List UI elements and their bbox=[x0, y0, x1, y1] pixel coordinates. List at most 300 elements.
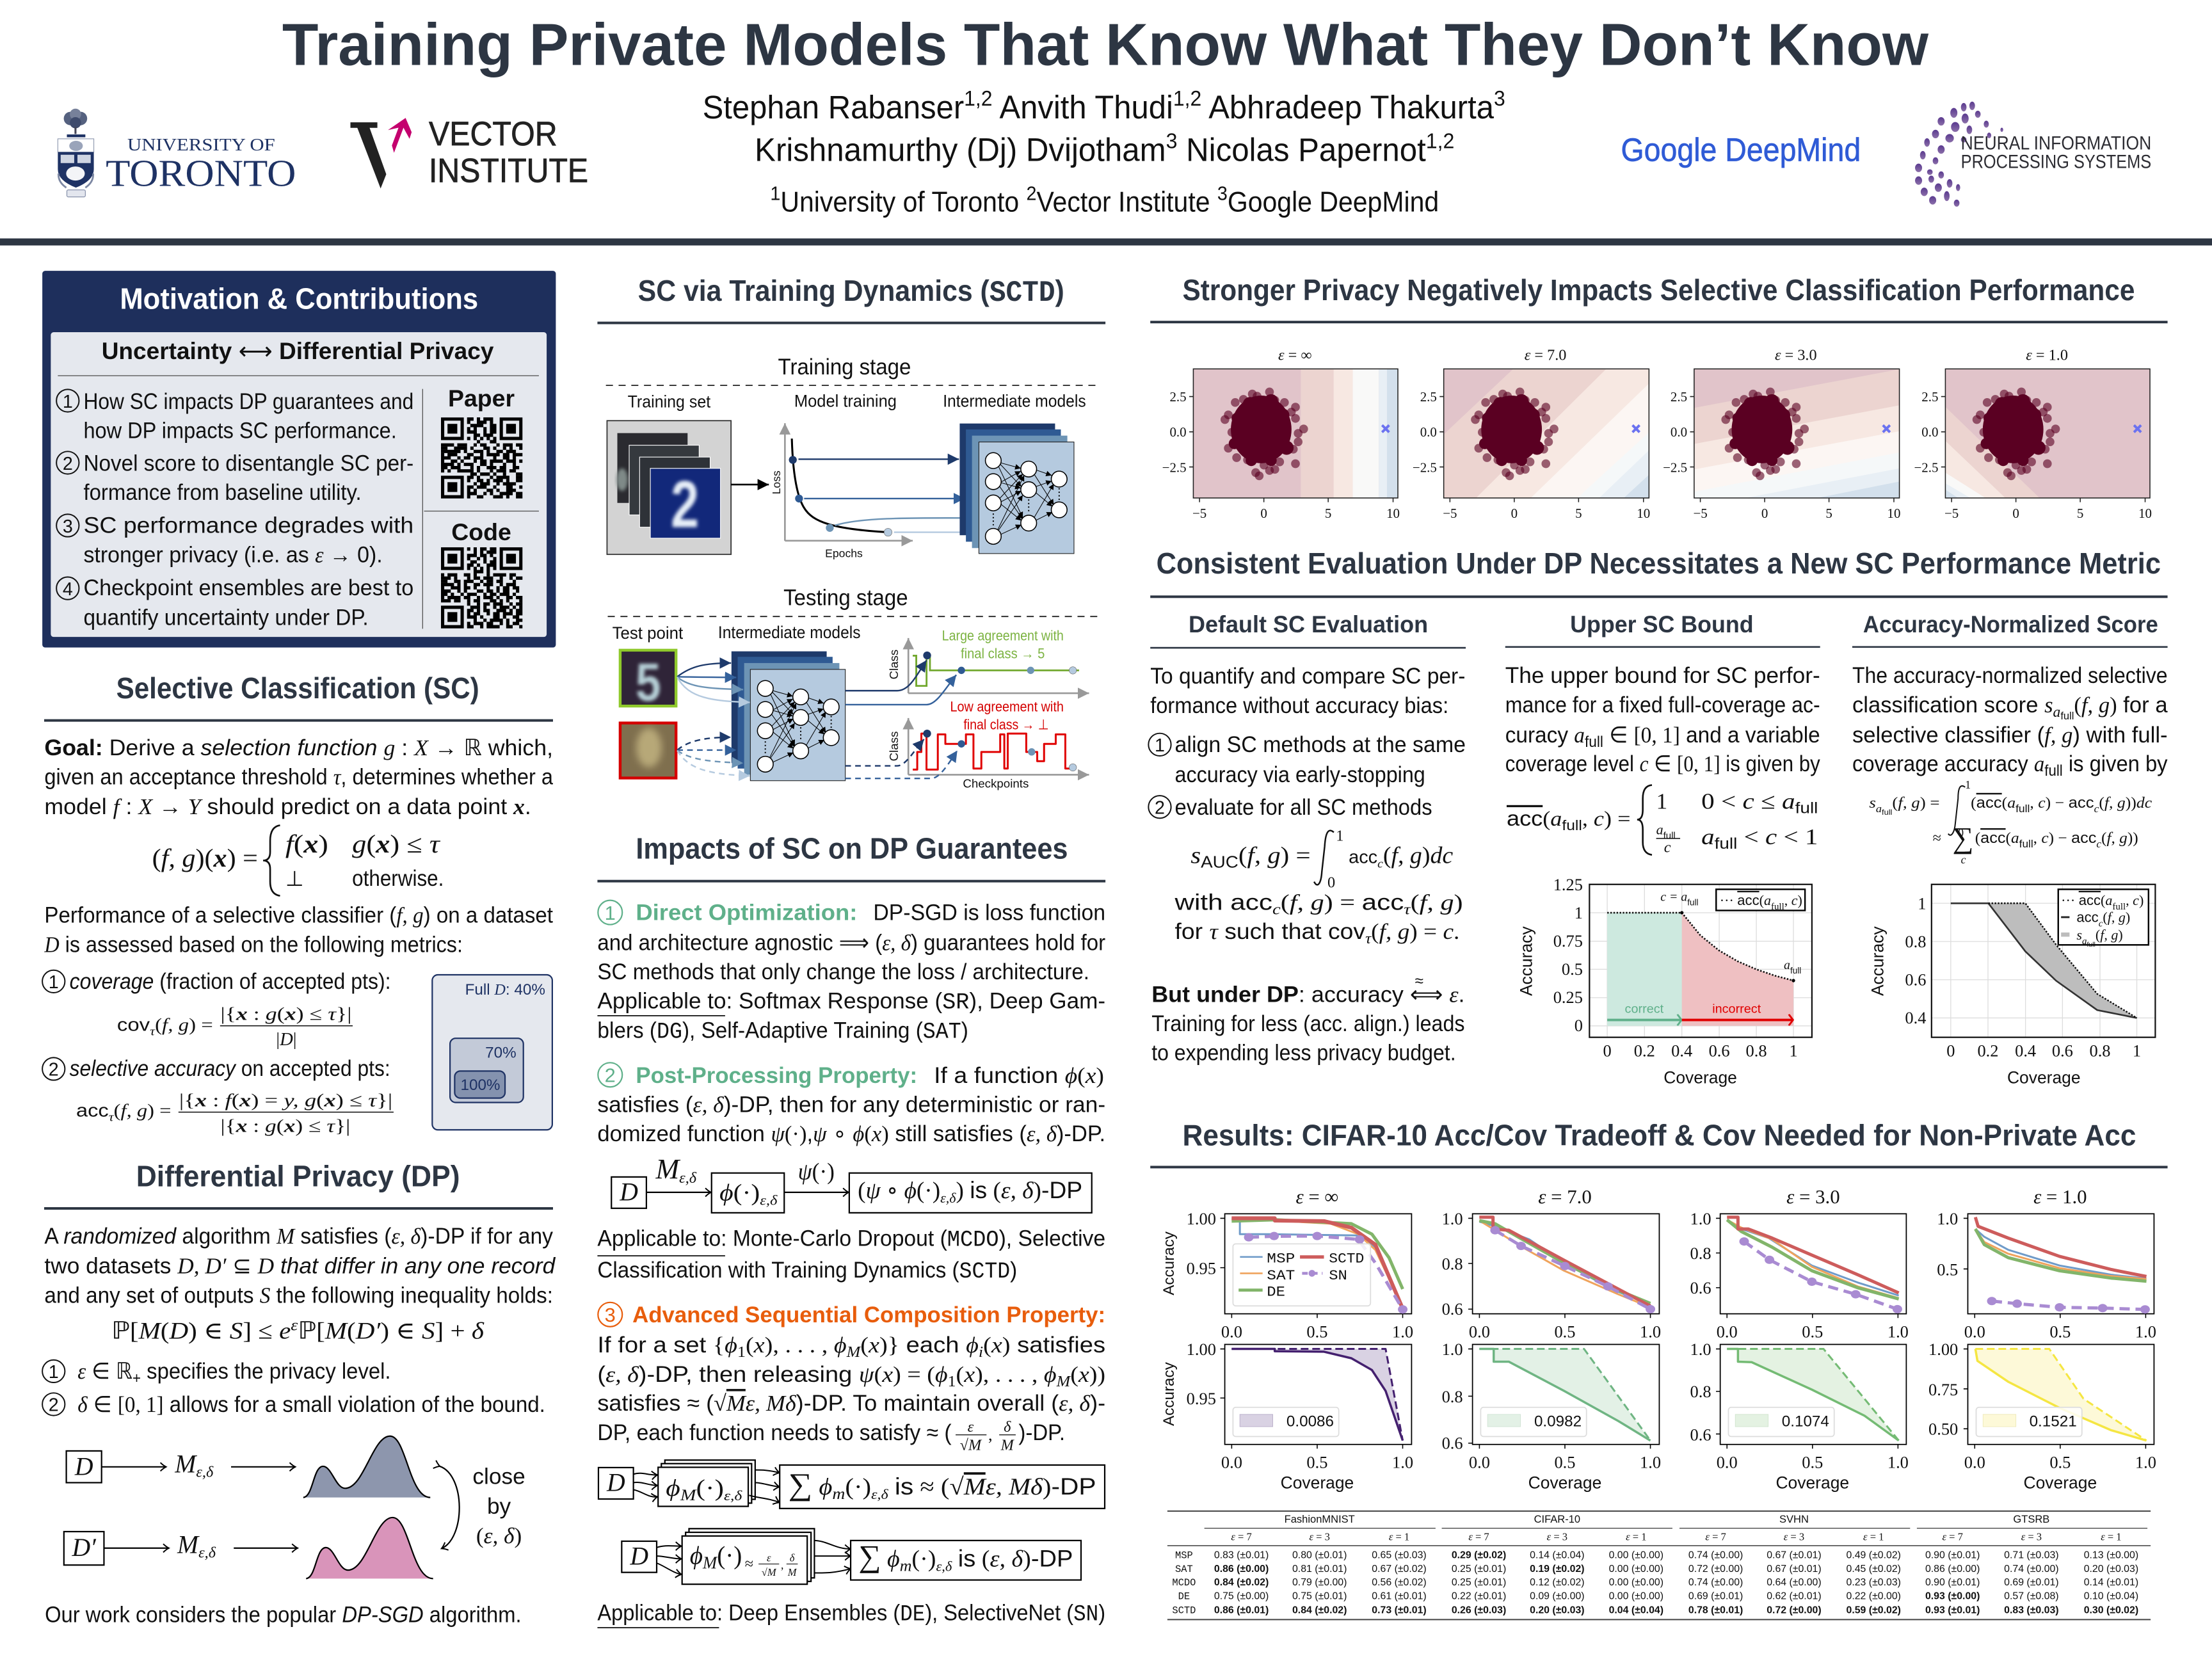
chart: accuracy-coverage epsilon 7: 0.8 bbox=[1442, 1254, 1463, 1274]
panel heading: Motivation & Contributions bbox=[120, 282, 478, 316]
row: SAT: 0.86 (±0.00) bbox=[1925, 1564, 1980, 1575]
chart: accuracy-coverage epsilon 3: 0.0 bbox=[1717, 1322, 1738, 1341]
formula: DP inequality: ℙ[M(D) ∈ S] ≤ eεℙ[M(D′) ∈ S] + δ bbox=[111, 1315, 485, 1345]
row: MCDO: 0.90 (±0.01) bbox=[1925, 1577, 1980, 1588]
legend: 0.1521 bbox=[2030, 1413, 2077, 1430]
formula: selective classifier: f(x) bbox=[285, 830, 328, 858]
chart: decision boundary epsilon 3: −2.5 bbox=[1663, 460, 1687, 475]
chart: upper bound accuracy vs coverage bbox=[1517, 875, 1812, 1087]
diagram: testing stage bbox=[608, 585, 1099, 790]
formula: selective classifier: g(x) ≤ τ bbox=[352, 830, 441, 858]
legend: SN bbox=[1329, 1268, 1347, 1284]
chart: decision boundary epsilon 1: 0.0 bbox=[1921, 424, 1938, 440]
chart: decision boundary epsilon 7: 2.5 bbox=[1420, 389, 1437, 405]
diagram: DP mechanism on neighbouring datasets: Mε,δ bbox=[174, 1450, 214, 1480]
contribution 4: Checkpoint ensembles are best to bbox=[83, 575, 413, 600]
chart: loss curve: Epochs bbox=[825, 547, 863, 560]
panel: motivation and contributions bbox=[42, 271, 556, 648]
text: goal definition: model f : X → Y should predict on a data point x. bbox=[44, 794, 531, 819]
formula: per-function budget: ε bbox=[968, 1418, 974, 1436]
chart: accuracy-coverage epsilon 1: 1.0 bbox=[2135, 1322, 2156, 1341]
contribution 2: Novel score to disentangle SC per- bbox=[83, 451, 413, 476]
chart: decision boundary epsilon infinity: ε = ∞ bbox=[1278, 346, 1312, 364]
column: default SC evaluation: Training for less (acc. align.) leads bbox=[1151, 1011, 1464, 1036]
contribution 3: SC performance degrades with bbox=[83, 513, 413, 538]
section: direct optimization bbox=[597, 901, 1105, 1045]
column: default SC evaluation: ≈ bbox=[1415, 973, 1423, 990]
row: SCTD: 0.78 (±0.01) bbox=[1688, 1605, 1743, 1616]
text: applicable to MCDO and SCTD: Classification with Training Dynamics (SCTD) bbox=[597, 1258, 1017, 1285]
column: accuracy-normalized score bbox=[1852, 611, 2168, 1087]
chart: coverage gap epsilon 7: Coverage bbox=[1528, 1473, 1601, 1492]
chart: coverage gap epsilon 3 bbox=[1690, 1340, 1909, 1492]
chart: decision boundary epsilon 3: 10 bbox=[1887, 506, 1900, 521]
formula: upper bound: a full < c < 1 bbox=[1701, 824, 1818, 853]
section: advanced composition bbox=[597, 1302, 1105, 1454]
row: MCDO: 0.12 (±0.02) bbox=[1530, 1577, 1585, 1588]
chart: upper bound accuracy vs coverage: 0.75 bbox=[1553, 931, 1583, 950]
chart: score area: 0.4 bbox=[1905, 1008, 1926, 1027]
subheading: Uncertainty ⟷ Differential Privacy bbox=[102, 337, 494, 365]
row: DE: 0.22 (±0.00) bbox=[1847, 1591, 1901, 1602]
chart: coverage gap epsilon infinity bbox=[1187, 1340, 1413, 1492]
column: default SC evaluation: for τ such that cov τ(f, g) = c. bbox=[1175, 919, 1459, 947]
chart: upper bound accuracy vs coverage: correct bbox=[1625, 1002, 1664, 1016]
text: metrics intro: D is assessed based on the following metrics: bbox=[44, 932, 463, 957]
column: default SC evaluation: formance without accuracy bias: bbox=[1150, 693, 1448, 718]
diagram: composition at reduced budget: , bbox=[781, 1559, 783, 1571]
list: epsilon and delta bbox=[42, 1358, 545, 1417]
column: upper SC bound bbox=[1505, 611, 1820, 1087]
diagram: composition at full budget bbox=[598, 1460, 1105, 1509]
list: epsilon and delta: δ ∈ [0, 1] allows for a small violation of the bound. bbox=[77, 1392, 545, 1417]
heading: impacts: Impacts of SC on DP Guarantees bbox=[636, 831, 1068, 865]
chart: coverage gap epsilon infinity: Coverage bbox=[1281, 1473, 1354, 1492]
column: upper SC bound: curacy afull ∈ [0, 1] and a variable bbox=[1505, 723, 1820, 750]
contribution 4: quantify uncertainty under DP. bbox=[83, 605, 369, 630]
table header: GTSRB bbox=[2013, 1513, 2049, 1525]
chart: decision boundary epsilon 3: 0 bbox=[1761, 506, 1768, 521]
chart: coverage gap epsilon 1: 0.0 bbox=[1964, 1453, 1985, 1472]
diagram: DP mechanism on neighbouring datasets: D bbox=[74, 1452, 93, 1480]
row: DE bbox=[1178, 1591, 2138, 1603]
chart: score area: 0 bbox=[1946, 1041, 1955, 1061]
legend: ··· acc(afull, c) bbox=[2061, 892, 2144, 912]
section: direct optimization: Applicable to: Softmax Response (SR), Deep Gam- bbox=[597, 989, 1105, 1016]
legend: accc(f, g) bbox=[2076, 909, 2130, 929]
row: MSP bbox=[1175, 1550, 2138, 1562]
chart: decision boundary epsilon 3: 5 bbox=[1825, 506, 1832, 521]
row: SCTD: 0.26 (±0.03) bbox=[1452, 1605, 1506, 1616]
chart: decision boundary epsilon 3: ε = 3.0 bbox=[1775, 346, 1817, 364]
chart: accuracy-coverage epsilon 3: 1.0 bbox=[1690, 1209, 1711, 1228]
chart: accuracy-coverage epsilon 3: 0.5 bbox=[1802, 1322, 1823, 1341]
diagram: nested coverage boxes bbox=[432, 975, 552, 1130]
formula: per-function budget: δ bbox=[1004, 1418, 1011, 1436]
row: SAT: 0.72 (±0.00) bbox=[1688, 1564, 1743, 1575]
chart: decision boundary epsilon 3: 2.5 bbox=[1671, 389, 1687, 405]
row: MSP: 0.80 (±0.01) bbox=[1292, 1550, 1347, 1561]
column: accuracy-normalized score: selective classifier (f, g) with full- bbox=[1852, 723, 2168, 748]
diagram: composition at reduced budget bbox=[621, 1528, 1081, 1584]
metric: selective accuracy: acc τ(f, g ) = bbox=[76, 1101, 172, 1124]
section: direct optimization: 1 bbox=[605, 902, 616, 924]
metric: coverage: |D| bbox=[276, 1029, 297, 1050]
chart: upper bound accuracy vs coverage: Accuracy bbox=[1517, 926, 1536, 996]
diagram: training stage: Intermediate models bbox=[943, 391, 1086, 410]
contribution 2: formance from baseline utility. bbox=[83, 480, 362, 505]
diagram: post-processing bbox=[611, 1153, 1092, 1213]
row: MCDO bbox=[1172, 1577, 2138, 1589]
chart: decision boundary epsilon 3: 0.0 bbox=[1671, 424, 1687, 440]
model stack: testing bbox=[732, 652, 846, 781]
title: Training Private Models That Know What They Don’t Know bbox=[282, 11, 1929, 77]
formula: score: safull(f, g ) = bbox=[1869, 794, 1940, 817]
column: default SC evaluation: 1 bbox=[1155, 735, 1165, 756]
chart: score area: 0.4 bbox=[2015, 1041, 2036, 1061]
row: MSP: MSP bbox=[1175, 1550, 1193, 1562]
chart: coverage gap epsilon 7: 0.0 bbox=[1469, 1453, 1490, 1472]
row: SCTD: 0.20 (±0.03) bbox=[1530, 1605, 1585, 1616]
column: upper SC bound: coverage level c ∈ [0, 1] is given by bbox=[1505, 751, 1820, 776]
chart: upper bound accuracy vs coverage: 0.6 bbox=[1709, 1041, 1730, 1061]
contribution 2 bbox=[56, 451, 413, 505]
row: DE: 0.75 (±0.01) bbox=[1292, 1591, 1347, 1602]
chart: upper bound accuracy vs coverage: 0.5 bbox=[1562, 959, 1583, 979]
table header: ε = 7 bbox=[1231, 1530, 1252, 1543]
metric: selective accuracy: selective accuracy on accepted pts: bbox=[70, 1056, 390, 1081]
chart: high agreement trajectory: final class → 5 bbox=[961, 645, 1045, 661]
row: MSP: 0.90 (±0.01) bbox=[1925, 1550, 1980, 1561]
metric: coverage: 1 bbox=[49, 972, 59, 993]
diagram: DP mechanism on neighbouring datasets: close bbox=[472, 1464, 525, 1489]
chart: upper bound accuracy vs coverage: Coverage bbox=[1663, 1068, 1737, 1087]
diagram: composition at reduced budget: ≈ bbox=[745, 1555, 753, 1573]
chart titles: ε = 1.0 bbox=[2033, 1186, 2087, 1208]
row: MSP: 0.14 (±0.04) bbox=[1530, 1550, 1585, 1561]
chart: coverage gap epsilon 1: 0.5 bbox=[2049, 1453, 2071, 1472]
row: SCTD: 0.72 (±0.00) bbox=[1767, 1605, 1822, 1616]
diagram: DP mechanism on neighbouring datasets: by bbox=[487, 1494, 511, 1519]
image stack: training set bbox=[607, 421, 731, 554]
table header: ε = 7 bbox=[1942, 1530, 1963, 1543]
row: MSP: 0.83 (±0.01) bbox=[1214, 1550, 1269, 1561]
formula: score: 1 bbox=[1965, 778, 1971, 791]
row: DE: 0.22 (±0.01) bbox=[1452, 1591, 1506, 1602]
legend: SAT bbox=[1267, 1268, 1295, 1284]
image stack: training set: 2 bbox=[671, 467, 699, 541]
chart: score area: 1 bbox=[2133, 1041, 2141, 1061]
contribution 4 bbox=[56, 575, 413, 630]
diagram: training stage bbox=[606, 355, 1097, 560]
text: applicable to MCDO and SCTD: Applicable to: Monte-Carlo Dropout (MCDO), Selective bbox=[597, 1226, 1105, 1253]
logo: University of Toronto bbox=[58, 109, 296, 197]
chart: score area: 0.2 bbox=[1977, 1041, 1999, 1061]
chart: decision boundary epsilon 7: −2.5 bbox=[1413, 460, 1437, 475]
chart: accuracy-coverage epsilon 1 bbox=[1937, 1209, 2156, 1341]
table header: FashionMNIST bbox=[1285, 1513, 1355, 1525]
chart: coverage gap epsilon 7: 1.0 bbox=[1640, 1453, 1661, 1472]
row: MCDO: 0.64 (±0.00) bbox=[1767, 1577, 1822, 1588]
contribution 3: stronger privacy (i.e. as ε → 0). bbox=[83, 543, 383, 568]
chart: accuracy-coverage epsilon infinity: 1.00 bbox=[1187, 1209, 1216, 1228]
label: testing stage: Testing stage bbox=[783, 585, 908, 610]
row: SAT: 0.20 (±0.03) bbox=[2084, 1564, 2138, 1575]
column: accuracy-normalized score: coverage accuracy afull is given by bbox=[1852, 751, 2168, 779]
metric: selective accuracy: |{ x : g (x ) ≤ τ}| bbox=[220, 1116, 350, 1136]
chart: upper bound accuracy vs coverage: c = afull bbox=[1660, 890, 1698, 907]
chart: upper bound accuracy vs coverage: 0.2 bbox=[1634, 1041, 1655, 1061]
column: upper SC bound: mance for a fixed full-coverage ac- bbox=[1505, 693, 1820, 717]
chart: coverage gap epsilon infinity: 1.00 bbox=[1187, 1340, 1216, 1359]
row: SCTD: 0.73 (±0.01) bbox=[1372, 1605, 1427, 1616]
heading: differential privacy bbox=[44, 1160, 553, 1210]
row: SCTD: 0.93 (±0.01) bbox=[1925, 1605, 1980, 1616]
chart: coverage gap epsilon 7: 0.8 bbox=[1442, 1387, 1463, 1406]
logo: Google DeepMind: Google DeepMind bbox=[1621, 131, 1861, 168]
logo: NeurIPS: PROCESSING SYSTEMS bbox=[1961, 151, 2151, 172]
chart: decision boundary epsilon 7: ε = 7.0 bbox=[1525, 346, 1566, 364]
model stack: intermediate models bbox=[959, 424, 1074, 554]
logo: Vector Institute: INSTITUTE bbox=[429, 152, 588, 189]
QR code: paper bbox=[441, 419, 522, 497]
formula: AUC: sAUC (f, g ) = bbox=[1190, 843, 1311, 871]
chart: coverage gap epsilon 7: 1.0 bbox=[1442, 1340, 1463, 1359]
row: DE: 0.75 (±0.00) bbox=[1214, 1591, 1269, 1602]
chart: low agreement trajectory bbox=[846, 699, 1089, 790]
chart titles: ε = 3.0 bbox=[1786, 1186, 1840, 1208]
row: DE: 0.10 (±0.04) bbox=[2084, 1591, 2138, 1602]
legend bbox=[2058, 889, 2149, 949]
logo: NeurIPS: NEURAL INFORMATION bbox=[1961, 133, 2151, 154]
row: DE: 0.61 (±0.01) bbox=[1372, 1591, 1427, 1602]
diagram: composition at reduced budget: M bbox=[787, 1566, 797, 1578]
chart: high agreement trajectory bbox=[846, 628, 1089, 705]
diagram: DP mechanism on neighbouring datasets: D′ bbox=[71, 1534, 97, 1562]
text: DP definition bbox=[44, 1224, 556, 1308]
diagram: post-processing: Mε,δ bbox=[655, 1153, 697, 1187]
heading: results bbox=[1150, 1118, 2168, 1168]
formula: per-function budget: √M bbox=[960, 1437, 982, 1454]
chart: decision boundary epsilon 1: ε = 1.0 bbox=[2026, 346, 2068, 364]
chart: coverage gap epsilon 1: Coverage bbox=[2024, 1473, 2097, 1492]
chart: accuracy-coverage epsilon infinity: 0.5 bbox=[1306, 1322, 1327, 1341]
heading: differential privacy: Differential Privacy (DP) bbox=[136, 1160, 460, 1193]
text: applicable to DE and SN: Applicable to: Deep Ensembles (DE), SelectiveNet (SN) bbox=[597, 1601, 1105, 1628]
chart: accuracy-coverage epsilon 3: 0.6 bbox=[1690, 1278, 1711, 1297]
diagram: nested coverage boxes: 100% bbox=[460, 1077, 500, 1094]
formula: upper bound: acc (afull, c) = bbox=[1507, 807, 1630, 833]
row: SCTD: 0.30 (±0.02) bbox=[2084, 1605, 2138, 1616]
text: goal definition bbox=[44, 735, 553, 819]
row: MCDO: 0.56 (±0.02) bbox=[1372, 1577, 1427, 1588]
chart: coverage gap epsilon 3: Coverage bbox=[1775, 1473, 1849, 1492]
legend: 0.0982 bbox=[1534, 1413, 1582, 1430]
row: DE: 0.09 (±0.00) bbox=[1530, 1591, 1585, 1602]
formula: score: ≈ bbox=[1933, 830, 1941, 847]
formula: selective classifier: otherwise. bbox=[352, 866, 444, 891]
chart: coverage gap epsilon infinity: 0.0 bbox=[1221, 1453, 1242, 1472]
chart: accuracy-coverage epsilon infinity: 1.0 bbox=[1392, 1322, 1413, 1341]
chart: decision boundary epsilon infinity: 0 bbox=[1260, 506, 1267, 521]
heading: SCTD bbox=[597, 274, 1105, 324]
formula: per-function budget: M bbox=[1000, 1437, 1015, 1454]
metric: coverage: |{ x : g (x ) ≤ τ}| bbox=[220, 1004, 351, 1025]
row: SCTD: 0.04 (±0.04) bbox=[1609, 1605, 1663, 1616]
table header: ε = 1 bbox=[1863, 1530, 1884, 1543]
contribution 1: 1 bbox=[63, 392, 73, 412]
formula: score: (acc(afull, c) − acc c(f, g))dc bbox=[1971, 794, 2152, 814]
chart: coverage gap epsilon 3: 0.0 bbox=[1717, 1453, 1738, 1472]
contribution 1: how DP impacts SC performance. bbox=[83, 418, 397, 443]
row: DE: 0.93 (±0.00) bbox=[1925, 1591, 1980, 1602]
chart: upper bound accuracy vs coverage: 1.25 bbox=[1553, 875, 1583, 894]
chart: score area bbox=[1868, 885, 2156, 1087]
paper label: Paper bbox=[448, 385, 515, 412]
image: confident test point bbox=[620, 650, 676, 712]
row: DE: 0.00 (±0.00) bbox=[1609, 1591, 1663, 1602]
column: default SC evaluation: evaluate for all SC methods bbox=[1175, 795, 1432, 820]
section: direct optimization: DP-SGD is loss function bbox=[873, 901, 1105, 926]
diagram: DP mechanism on neighbouring datasets: (ε, δ) bbox=[476, 1523, 522, 1548]
authors: Stephan Rabanser1,2 Anvith Thudi1,2 Abhradeep Thakurta3 bbox=[703, 87, 1505, 125]
row: SAT: 0.19 (±0.02) bbox=[1530, 1564, 1585, 1575]
row: SAT: 0.86 (±0.00) bbox=[1214, 1564, 1269, 1575]
row: SCTD: 0.86 (±0.01) bbox=[1214, 1605, 1269, 1616]
table header: ε = 3 bbox=[2021, 1530, 2042, 1543]
chart titles: ε = 7.0 bbox=[1538, 1186, 1592, 1208]
formula: per-function budget: , bbox=[988, 1425, 993, 1444]
table header: ε = 7 bbox=[1468, 1530, 1489, 1543]
formula: AUC: 1 bbox=[1336, 828, 1343, 845]
row: SAT: 0.67 (±0.01) bbox=[1767, 1564, 1822, 1575]
row: SCTD: 0.59 (±0.02) bbox=[1847, 1605, 1901, 1616]
chart: decision boundary epsilon 7: −5 bbox=[1443, 506, 1457, 521]
row: SAT: SAT bbox=[1175, 1564, 1193, 1575]
legend: ··· acc(afull, c) bbox=[1720, 892, 1802, 912]
subheading: Upper SC Bound bbox=[1570, 611, 1754, 637]
chart: score area: Accuracy bbox=[1868, 926, 1887, 996]
table header: ε = 1 bbox=[1389, 1530, 1409, 1543]
chart: coverage gap epsilon 1: 1.0 bbox=[2135, 1453, 2156, 1472]
image: uncertain test point bbox=[620, 723, 676, 778]
diagram: composition at reduced budget: D bbox=[629, 1542, 648, 1570]
legend: MSP bbox=[1267, 1251, 1295, 1267]
row: MCDO: 0.25 (±0.01) bbox=[1452, 1577, 1506, 1588]
authors bbox=[703, 87, 1505, 168]
chart: decision boundary epsilon 3 bbox=[1663, 346, 1900, 521]
formula: selective classifier: (f, g)(x) = bbox=[152, 844, 258, 872]
chart: coverage gap epsilon 1: 1.00 bbox=[1928, 1340, 1958, 1359]
icon: crest bbox=[58, 109, 94, 197]
row: MSP: 0.71 (±0.03) bbox=[2004, 1550, 2059, 1561]
row: SAT: 0.00 (±0.00) bbox=[1609, 1564, 1663, 1575]
chart: score area: 0.8 bbox=[1905, 932, 1926, 951]
legend bbox=[1728, 1407, 1834, 1436]
chart: accuracy-coverage epsilon 7: 0.5 bbox=[1554, 1322, 1576, 1341]
chart: decision boundary epsilon 3: −5 bbox=[1693, 506, 1708, 521]
row: SAT: 0.81 (±0.01) bbox=[1292, 1564, 1347, 1575]
row: MSP: 0.49 (±0.02) bbox=[1847, 1550, 1901, 1561]
chart: low agreement trajectory: final class → ⊥ bbox=[963, 716, 1049, 732]
diagram: composition at reduced budget: ϕM(·) bbox=[690, 1542, 742, 1572]
chart: decision boundary epsilon 7: 0 bbox=[1511, 506, 1518, 521]
row: MCDO: 0.84 (±0.02) bbox=[1214, 1577, 1269, 1588]
diagram: DP mechanism on neighbouring datasets bbox=[64, 1436, 525, 1578]
QR code: code bbox=[441, 549, 522, 627]
chart: accuracy-coverage epsilon 7 bbox=[1442, 1209, 1661, 1341]
chart: decision boundary epsilon infinity: 2.5 bbox=[1169, 389, 1187, 405]
diagram: nested coverage boxes: 70% bbox=[485, 1045, 517, 1062]
chart: coverage gap epsilon 3: 0.8 bbox=[1690, 1382, 1711, 1401]
chart: upper bound accuracy vs coverage: 0.4 bbox=[1671, 1041, 1692, 1061]
row: SAT bbox=[1175, 1564, 2138, 1575]
chart: decision boundary epsilon 7: 5 bbox=[1575, 506, 1582, 521]
row: MSP: 0.74 (±0.00) bbox=[1688, 1550, 1743, 1561]
chart: coverage gap epsilon infinity: 1.0 bbox=[1392, 1453, 1413, 1472]
row: MSP: 0.65 (±0.03) bbox=[1372, 1550, 1427, 1561]
legend: DE bbox=[1267, 1284, 1285, 1300]
chart: high agreement trajectory: Class bbox=[887, 650, 901, 680]
row: MCDO: 0.74 (±0.00) bbox=[1688, 1577, 1743, 1588]
chart: coverage gap epsilon 7 bbox=[1442, 1340, 1661, 1492]
section: advanced composition: (ε, δ)-DP, then releasing ψ(x) = ( ϕ1(x), . . . , ϕM(x)) bbox=[597, 1362, 1105, 1390]
row: MSP: 0.29 (±0.02) bbox=[1452, 1550, 1506, 1561]
column: default SC evaluation: with acc c(f, g ) = acc τ(f, g ) bbox=[1174, 890, 1463, 918]
chart: coverage gap epsilon 3: 0.5 bbox=[1802, 1453, 1823, 1472]
chart: decision boundary epsilon infinity: −5 bbox=[1192, 506, 1206, 521]
contribution 1: How SC impacts DP guarantees and bbox=[83, 389, 413, 414]
legend bbox=[1480, 1407, 1587, 1436]
chart: score area: 0.6 bbox=[2052, 1041, 2073, 1061]
chart: decision boundary epsilon 1: 2.5 bbox=[1921, 389, 1938, 405]
list: epsilon and delta: ε ∈ ℝ+ specifies the privacy level. bbox=[77, 1358, 391, 1387]
chart: decision boundary epsilon 1: 10 bbox=[2138, 506, 2152, 521]
formula: upper bound: afull bbox=[1656, 822, 1676, 841]
text: goal definition: Goal: Derive a selection function g : X → ℝ which, bbox=[44, 735, 553, 761]
diagram: testing stage: Test point bbox=[613, 623, 684, 643]
heading: consistent evaluation: Consistent Evaluation Under DP Necessitates a New SC Performance Metric bbox=[1157, 547, 2161, 580]
row: MSP: 0.00 (±0.00) bbox=[1609, 1550, 1663, 1561]
text: metrics intro: Performance of a selective classifier (f, g) on a dataset bbox=[44, 902, 553, 927]
chart: accuracy-coverage epsilon 7: 1.0 bbox=[1640, 1322, 1661, 1341]
table header: ε = 1 bbox=[2101, 1530, 2122, 1543]
chart: coverage gap epsilon infinity: 0.95 bbox=[1187, 1389, 1216, 1408]
chart: upper bound accuracy vs coverage: 1 bbox=[1575, 903, 1583, 922]
column: default SC evaluation: But under DP : accuracy ⟺ ε. bbox=[1151, 982, 1464, 1007]
contribution 3 bbox=[56, 513, 413, 568]
column: default SC evaluation: To quantify and compare SC per- bbox=[1150, 664, 1465, 689]
chart: high agreement trajectory: Large agreement with bbox=[942, 628, 1064, 644]
column: default SC evaluation: accuracy via early-stopping bbox=[1175, 762, 1425, 787]
chart: decision boundary epsilon infinity bbox=[1162, 346, 1400, 521]
code label: Code bbox=[451, 518, 511, 545]
chart: accuracy-coverage epsilon 7: 1.0 bbox=[1442, 1209, 1463, 1228]
chart: score area: Coverage bbox=[2007, 1068, 2081, 1087]
text: applicable to MCDO and SCTD bbox=[597, 1226, 1105, 1285]
logo: Vector Institute bbox=[350, 115, 588, 189]
row: SCTD: SCTD bbox=[1172, 1605, 1196, 1617]
formula: AUC: accc(f, g)dc bbox=[1349, 843, 1454, 870]
chart: decision boundary epsilon 1: −5 bbox=[1944, 506, 1959, 521]
affiliations: 1University of Toronto 2Vector Institute 3Google DeepMind bbox=[770, 182, 1439, 218]
chart: coverage gap epsilon 1: 0.50 bbox=[1928, 1420, 1958, 1439]
row: SAT: 0.45 (±0.02) bbox=[1847, 1564, 1901, 1575]
formula: upper bound: c bbox=[1664, 838, 1671, 856]
section: post-processing: satisfies (ε, δ)-DP, then for any deterministic or ran- bbox=[597, 1092, 1105, 1117]
heading: impacts bbox=[597, 831, 1105, 883]
row: SAT: 0.67 (±0.02) bbox=[1372, 1564, 1427, 1575]
